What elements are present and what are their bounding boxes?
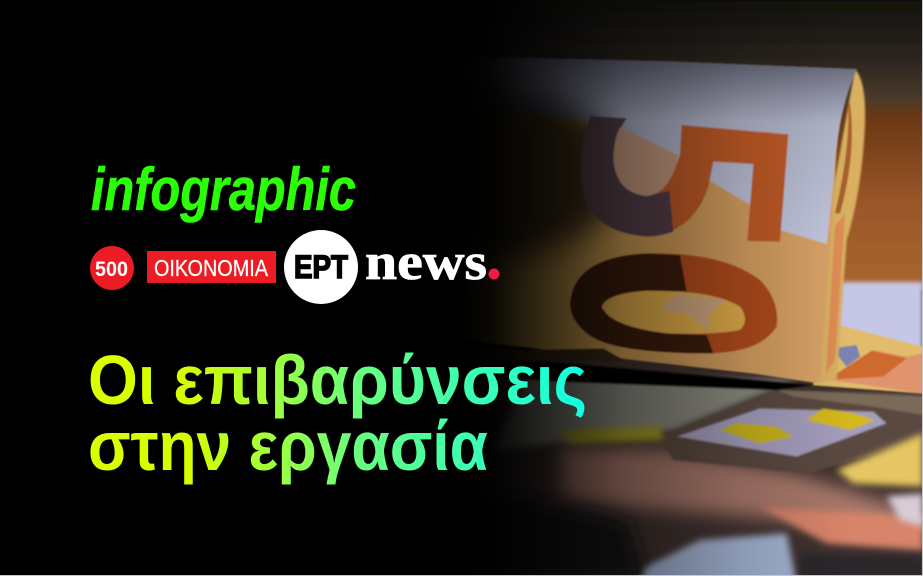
shadow on upper-left of banknote — [337, 87, 623, 260]
lavender note behind roll — [820, 282, 923, 352]
table and lower note — [453, 347, 923, 576]
blurred wooden background — [460, 0, 923, 290]
logo: 500 badge — [90, 246, 134, 290]
left-to-right black fade over photo — [460, 0, 923, 576]
digit 0 — [570, 253, 777, 353]
yellow note corner at right — [453, 320, 923, 393]
banknote white upper band — [460, 57, 857, 244]
title: στην εργασία — [88, 407, 488, 485]
title: Οι επιβαρύνσεις — [88, 341, 587, 419]
rolled banknote — [337, 57, 865, 383]
logo: 500 badge: 500 — [95, 258, 128, 281]
logo: ΕΡΤ circle — [284, 230, 358, 304]
left solid black panel — [0, 0, 460, 576]
title — [88, 341, 587, 485]
logos row — [90, 230, 500, 304]
photo: rolled euro banknotes — [337, 0, 923, 576]
logo: news wordmark: news — [365, 234, 487, 291]
digit 5 — [581, 116, 788, 242]
banknote print along lower edge — [460, 345, 627, 362]
logo: ΕΡΤ circle: ΕΡΤ — [294, 249, 348, 285]
logo: ΟΙΚΟΝΟΜΙΑ label: ΟΙΚΟΝΟΜΙΑ — [154, 255, 269, 281]
heading: infographic: infographic — [91, 156, 356, 223]
